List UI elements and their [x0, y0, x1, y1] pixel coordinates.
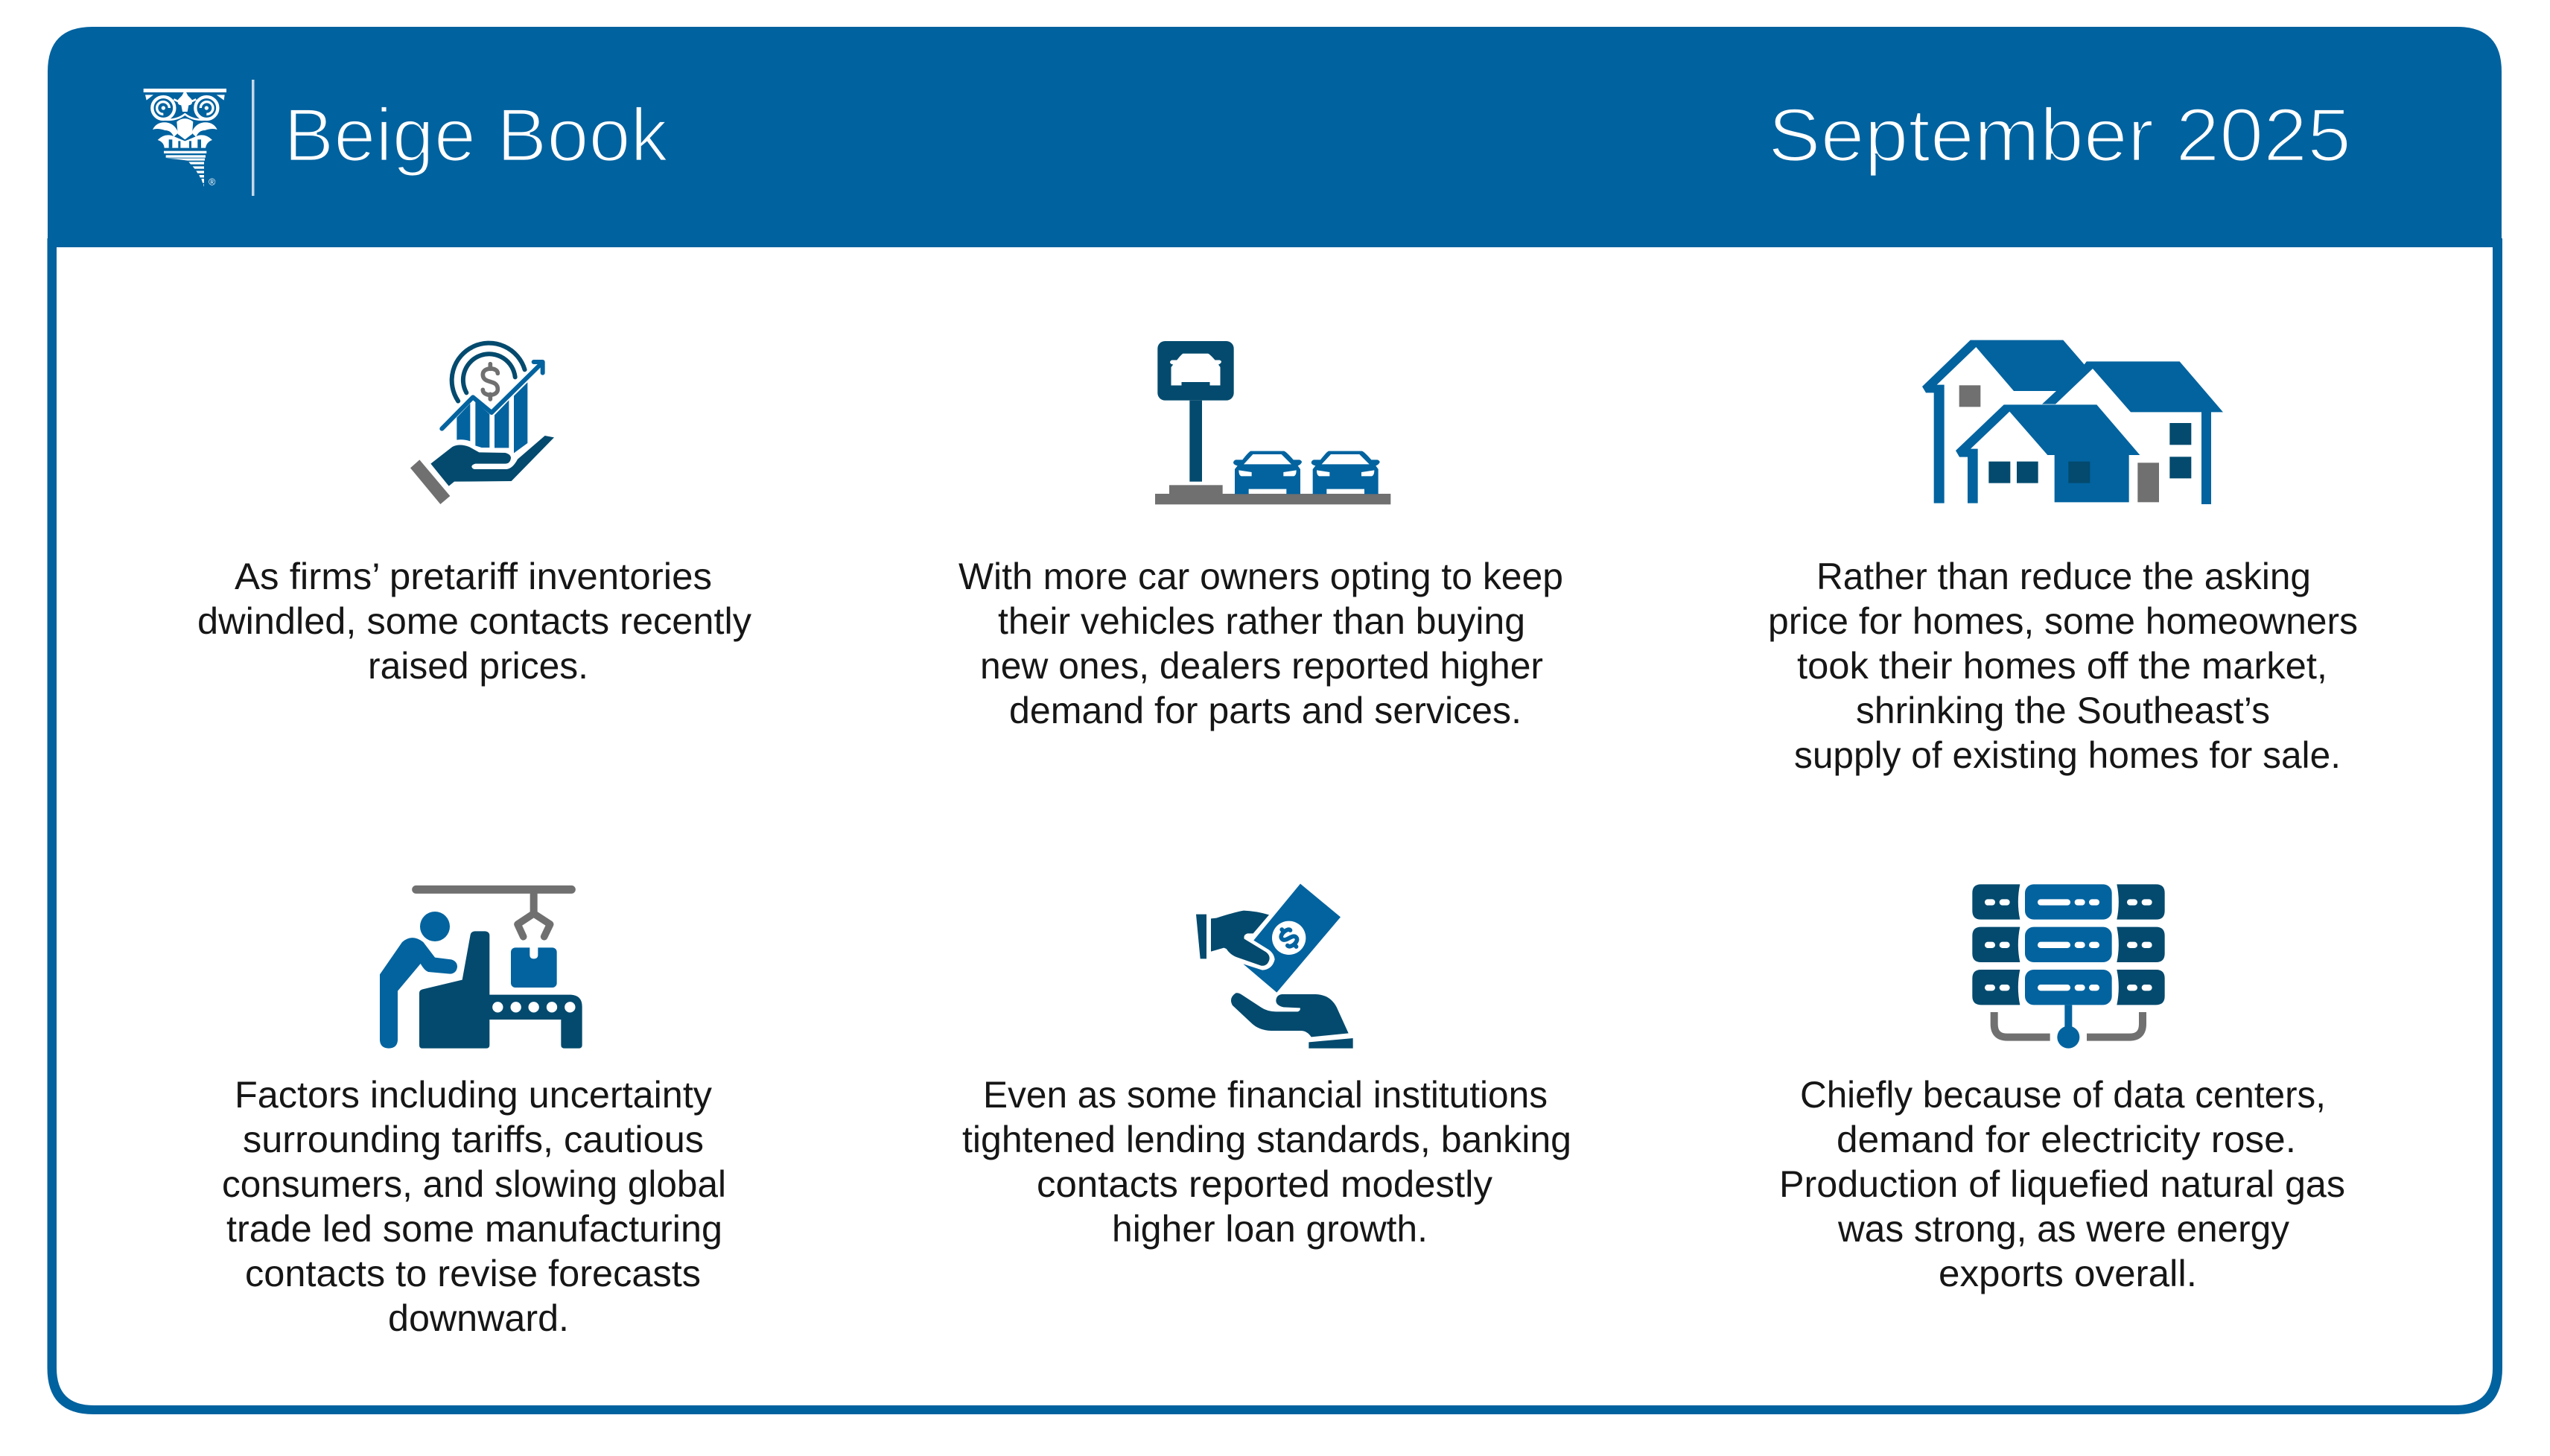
text: banking	[962, 1074, 1571, 1250]
icon: car dealership sign and cars	[1155, 341, 1390, 504]
text: manufacturing	[222, 1074, 726, 1339]
title: Beige Book	[284, 94, 668, 177]
text: manufacturing: trade led some manufacturing	[226, 1208, 722, 1250]
text: inventories	[197, 556, 751, 687]
text: energy	[1779, 1074, 2345, 1294]
text: banking: contacts reported modestly	[1037, 1163, 1492, 1205]
text: homes: took their homes off the market,	[1797, 645, 2327, 687]
icon: data center servers	[1972, 884, 2165, 1049]
text: car parts demand: With more car owners opting to keep	[958, 556, 1563, 597]
text: inventories: raised prices.	[368, 645, 588, 687]
text: homes: supply of existing homes for sale.	[1794, 734, 2341, 776]
icon: Federal Reserve column logo	[144, 89, 226, 187]
text: homes: price for homes, some homeowners	[1768, 600, 2358, 642]
text: energy: demand for electricity rose.	[1837, 1119, 2296, 1160]
text: homes: shrinking the Southeast’s	[1856, 690, 2270, 731]
text: energy: Production of liquefied natural gas	[1779, 1163, 2345, 1205]
text: car parts demand: demand for parts and services.	[1009, 690, 1522, 731]
text: energy: exports overall.	[1939, 1253, 2197, 1294]
text: car parts demand	[958, 556, 1563, 731]
icon: hands exchanging money	[1196, 884, 1353, 1049]
text: energy: Chiefly because of data centers,	[1800, 1074, 2326, 1116]
icon: hand holding rising chart and dollar	[410, 343, 554, 504]
text: banking: tightened lending standards, banking	[962, 1119, 1571, 1160]
text: manufacturing: consumers, and slowing global	[222, 1163, 726, 1205]
text: banking: higher loan growth.	[1112, 1208, 1428, 1250]
divider rule	[252, 80, 255, 196]
text: inventories: dwindled, some contacts recently	[197, 600, 751, 642]
text: manufacturing: Factors including uncertainty	[235, 1074, 712, 1116]
text: banking: Even as some financial institutions	[983, 1074, 1548, 1116]
date: September 2025	[1768, 94, 2351, 177]
text: car parts demand: their vehicles rather than buying	[998, 600, 1525, 642]
header	[144, 80, 2351, 196]
text: inventories: As firms’ pretariff inventories	[235, 556, 712, 597]
icon: houses	[1922, 340, 2223, 504]
text: homes	[1768, 556, 2358, 776]
text: manufacturing: surrounding tariffs, cautious	[243, 1119, 704, 1160]
text: homes: Rather than reduce the asking	[1816, 556, 2311, 597]
text: manufacturing: downward.	[388, 1297, 569, 1339]
text: manufacturing: contacts to revise forecasts	[245, 1253, 701, 1294]
icon: Federal Reserve column logo: ®	[209, 177, 216, 187]
text: car parts demand: new ones, dealers reported higher	[980, 645, 1543, 687]
icon: factory worker and conveyor	[380, 889, 582, 1049]
text: energy: was strong, as were energy	[1837, 1208, 2289, 1250]
